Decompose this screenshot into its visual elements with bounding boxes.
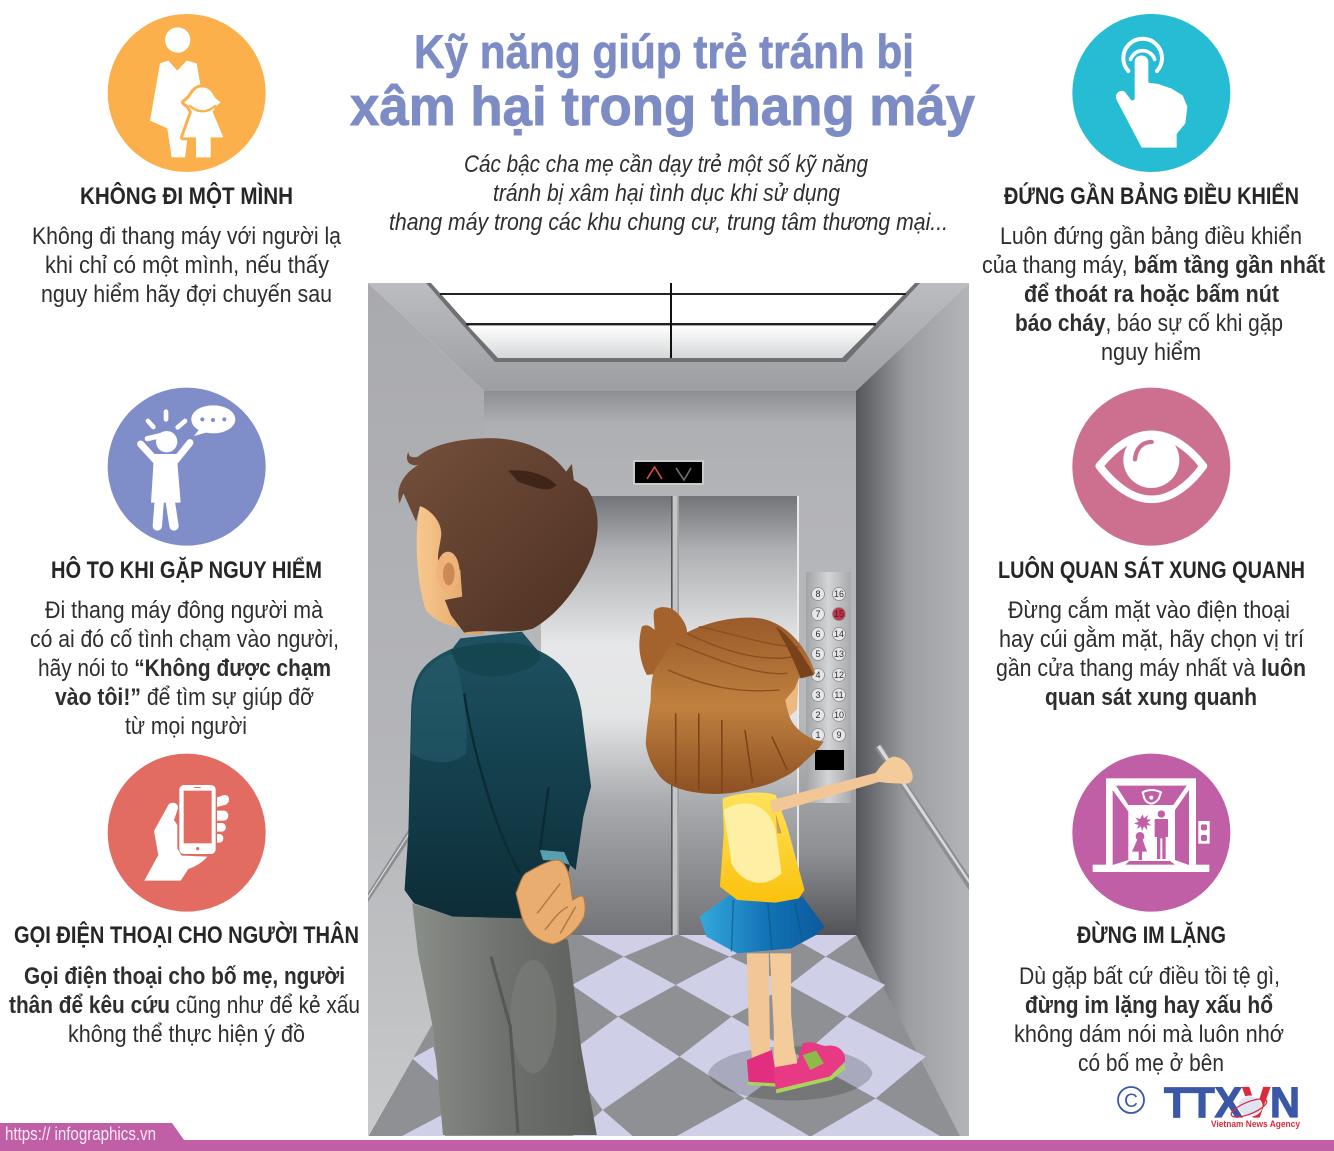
pants [412, 903, 597, 1135]
button panel: 7 [815, 609, 821, 619]
button panel: 12 [834, 670, 844, 680]
elevator doors [541, 496, 799, 936]
button panel: 8 [815, 589, 821, 599]
logo: TTXVN: Vietnam News Agency [1211, 1119, 1301, 1130]
panel: tip 4 control panel [982, 14, 1325, 366]
body text: gần cửa thang máy nhất và luôn [996, 655, 1306, 682]
body text: Luôn đứng gần bảng điều khiển [1000, 223, 1302, 250]
heading: GỌI ĐIỆN THOẠI CHO NGƯỜI THÂN [14, 921, 359, 949]
body text: hay cúi gằm mặt, hãy chọn vị trí [999, 626, 1304, 653]
icon: hand holding phone [108, 754, 266, 912]
panel: tip 2 shout [30, 388, 339, 740]
icon: mother and child [108, 14, 266, 172]
body text [996, 597, 1306, 711]
heading: KHÔNG ĐI MỘT MÌNH [80, 182, 293, 210]
handrail right [875, 744, 972, 895]
button panel [806, 572, 851, 803]
body text: có bố mẹ ở bên [1078, 1050, 1224, 1077]
button panel: 10 [834, 710, 844, 720]
handrail left [368, 830, 408, 902]
girl [639, 607, 913, 1093]
subtitle: Các bậc cha mẹ cần dạy trẻ một số kỹ năng [464, 151, 869, 178]
hands [516, 860, 585, 944]
body text: thân để kêu cứu cũng như để kẻ xấu [9, 992, 360, 1019]
title: Kỹ năng giúp trẻ tránh bị [414, 25, 914, 78]
floor tiles [368, 935, 960, 1137]
icon: elevator with camera [1072, 754, 1230, 912]
body text: Dù gặp bất cứ điều tồi tệ gì, [1019, 963, 1280, 990]
heading: HÔ TO KHI GẶP NGUY HIỂM [51, 556, 322, 584]
button panel: 15 [834, 609, 844, 619]
panel: tip 5 observe [996, 388, 1306, 711]
back wall [484, 391, 856, 935]
logo: TTXVN: TTXVN [1164, 1079, 1300, 1127]
title: xâm hại trong thang máy [350, 75, 975, 137]
top [720, 793, 805, 903]
button panel: 2 [815, 710, 821, 720]
body text: báo cháy, báo sự cố khi gặp [1015, 310, 1283, 337]
floor indicator [633, 460, 704, 485]
subtitle: tránh bị xâm hại tình dục khi sử dụng [493, 180, 841, 207]
button panel: 14 [834, 629, 844, 639]
ceiling [368, 283, 969, 391]
button panel: 6 [815, 629, 821, 639]
body text: có ai đó cố tình chạm vào người, [30, 626, 339, 653]
body text: khi chỉ có một mình, nếu thấy [45, 252, 329, 279]
panel: tip 3 phone [9, 754, 360, 1048]
button panel: 11 [834, 690, 844, 700]
body text: không dám nói mà luôn nhớ [1014, 1021, 1284, 1048]
button panel: 13 [834, 649, 844, 659]
footer bar and URL tab: https:// infographics.vn [5, 1124, 156, 1144]
body text: đừng im lặng hay xấu hổ [1025, 992, 1273, 1019]
jacket [405, 632, 591, 918]
button panel: 9 [836, 730, 842, 740]
button panel: 3 [815, 690, 821, 700]
panel: tip 1 do not go alone [32, 14, 342, 308]
button panel: 4 [815, 670, 821, 680]
body text [30, 597, 339, 740]
body text [32, 223, 342, 308]
copyright mark [1118, 1087, 1144, 1113]
heading: ĐỪNG IM LẶNG [1077, 921, 1226, 949]
icon: eye [1072, 388, 1230, 546]
ear [436, 552, 460, 592]
ponytail [639, 607, 687, 675]
neck and face [417, 507, 491, 634]
man [398, 438, 598, 1135]
subtitle [389, 151, 948, 236]
hair [646, 618, 824, 794]
body text: Không đi thang máy với người lạ [32, 223, 342, 250]
body text: để thoát ra hoặc bấm nút [1024, 281, 1279, 308]
copyright mark: C [1124, 1091, 1138, 1112]
title [350, 25, 975, 137]
body text: vào tôi!” để tìm sự giúp đỡ [55, 684, 314, 711]
body text: Gọi điện thoại cho bố mẹ, người [24, 963, 345, 990]
hair [398, 438, 598, 633]
button panel: 5 [815, 649, 821, 659]
icon: finger pressing button [1072, 14, 1230, 172]
illustration: elevator scene [368, 283, 972, 1137]
icon: child shouting [108, 388, 266, 546]
body text: nguy hiểm hãy đợi chuyến sau [41, 281, 332, 308]
panel: tip 6 do not stay silent [1014, 754, 1284, 1077]
body text: từ mọi người [125, 713, 247, 740]
body text [1014, 963, 1284, 1077]
arm [770, 773, 880, 813]
face [781, 673, 799, 720]
left wall [368, 283, 484, 1136]
button panel: 1 [815, 730, 821, 740]
body text: hãy nói to “Không được chạm [38, 655, 331, 682]
subtitle: thang máy trong các khu chung cư, trung tâm thương mại... [389, 209, 948, 236]
legs [747, 953, 772, 1063]
body text [982, 223, 1325, 366]
body text: không thể thực hiện ý đồ [68, 1021, 305, 1048]
shoes [747, 1050, 778, 1083]
body text [9, 963, 360, 1048]
skirt [700, 895, 825, 953]
body text: Đừng cắm mặt vào điện thoại [1008, 597, 1290, 624]
cuff [540, 850, 570, 865]
body text: nguy hiểm [1101, 339, 1201, 366]
button panel: 16 [834, 589, 844, 599]
footer bar and URL tab [0, 1123, 1334, 1151]
body text: quan sát xung quanh [1045, 684, 1257, 711]
body text: Đi thang máy đông người mà [45, 597, 324, 624]
right wall [856, 283, 969, 1136]
